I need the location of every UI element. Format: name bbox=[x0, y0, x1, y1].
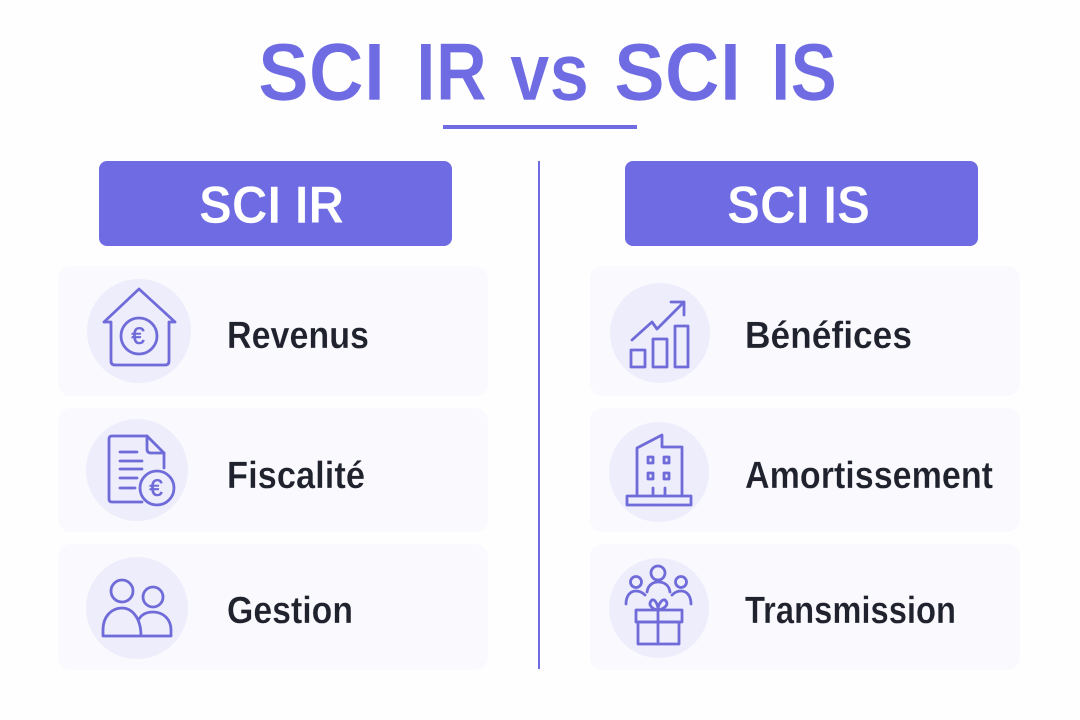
title: SCI bbox=[258, 27, 385, 118]
title: SCI bbox=[614, 27, 741, 118]
label: Amortissement: Amortissement bbox=[745, 455, 993, 497]
icon: house with euro: € bbox=[131, 323, 145, 350]
icon: growth chart bbox=[631, 302, 688, 367]
heading: SCI IS bbox=[625, 161, 978, 246]
icon: building bbox=[627, 435, 691, 505]
panel: SCI IS column bbox=[590, 161, 1020, 670]
row: Bénéfices bbox=[590, 266, 1020, 396]
title bbox=[258, 27, 837, 118]
label: Transmission: Transmission bbox=[745, 590, 956, 632]
row: Fiscalité bbox=[58, 408, 488, 532]
column divider bbox=[538, 161, 540, 669]
title: vs bbox=[510, 27, 589, 118]
label: Revenus: Revenus bbox=[227, 315, 369, 357]
icon: family and gift bbox=[626, 566, 691, 644]
heading: SCI IR: SCI IR bbox=[199, 176, 344, 235]
title underline bbox=[443, 125, 637, 129]
label: Bénéfices: Bénéfices bbox=[745, 315, 912, 357]
title: IS bbox=[771, 27, 837, 118]
heading: SCI IS: SCI IS bbox=[727, 176, 870, 235]
heading: SCI IR bbox=[99, 161, 452, 246]
icon: two people bbox=[103, 580, 171, 636]
row: Transmission bbox=[590, 544, 1020, 670]
icon: document with euro: € bbox=[149, 475, 163, 502]
icon: document with euro bbox=[109, 436, 174, 505]
label: Fiscalité: Fiscalité bbox=[227, 455, 365, 497]
panel: SCI IR column bbox=[58, 161, 488, 670]
row: Gestion bbox=[58, 544, 488, 670]
label: Gestion: Gestion bbox=[227, 590, 353, 632]
row: Revenus bbox=[58, 266, 488, 396]
row: Amortissement bbox=[590, 408, 1020, 532]
title: IR bbox=[416, 27, 487, 118]
icon: house with euro bbox=[104, 289, 175, 365]
